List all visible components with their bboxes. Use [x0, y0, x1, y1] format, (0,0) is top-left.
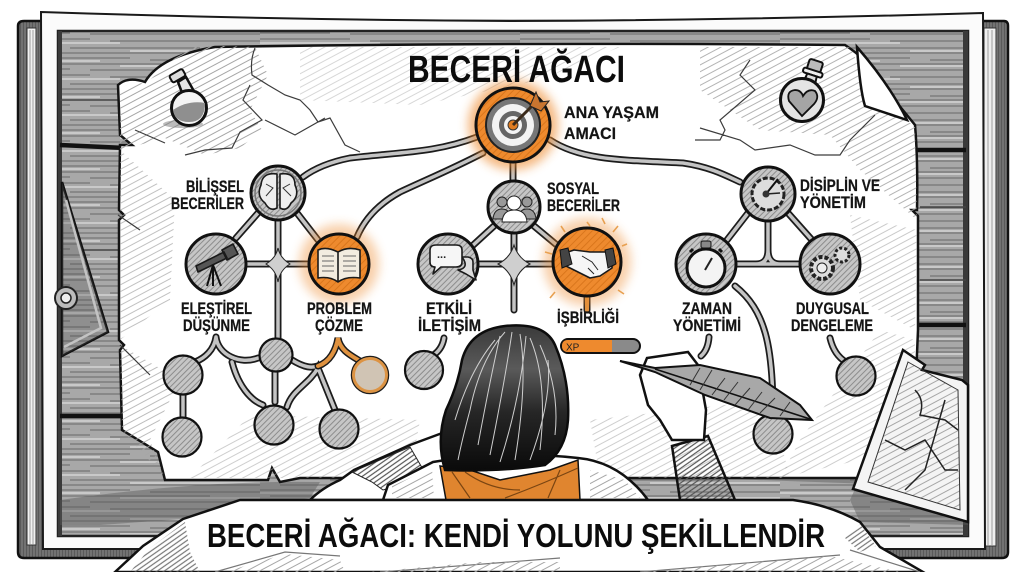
torso hatching	[392, 468, 640, 498]
node: chat	[418, 234, 478, 294]
XP progress bar	[561, 339, 640, 354]
bottom banner	[115, 500, 923, 572]
icon: left potion	[163, 69, 206, 128]
label: social skills: BECERİLER	[547, 196, 620, 215]
node: stopwatch	[676, 234, 736, 294]
label: time management: YÖNETİMİ	[673, 316, 741, 335]
label: critical thinking: ELEŞTİREL	[181, 299, 252, 318]
sketch hatching	[225, 554, 900, 572]
label: effective communication: İLETİŞİM	[418, 316, 481, 335]
folded map	[853, 350, 968, 522]
torn corners	[130, 522, 876, 572]
node: book	[299, 224, 379, 304]
hair strands	[455, 332, 556, 462]
label: main goal: AMACI	[564, 124, 616, 143]
parchment	[118, 44, 918, 482]
sketch marks	[215, 550, 920, 572]
left arm	[310, 432, 445, 500]
right arm	[672, 436, 735, 500]
node: people	[488, 181, 540, 233]
label: emotional balance: DENGELEME	[791, 316, 873, 335]
torso	[383, 455, 648, 500]
title: BECERİ AĞACI	[408, 47, 625, 91]
orange scarf	[440, 460, 580, 500]
node: telescope	[186, 234, 246, 294]
hand	[640, 352, 706, 440]
wood panel	[58, 31, 968, 536]
icon: heart potion	[780, 58, 826, 122]
hair	[441, 325, 568, 470]
label: main goal: ANA YAŞAM	[564, 103, 659, 122]
left sleeve hatching	[352, 447, 428, 490]
label: cognitive skills: BİLİŞSEL	[186, 177, 244, 196]
label: problem solving: ÇÖZME	[315, 316, 363, 335]
leaf nodes	[162, 338, 876, 456]
label: effective communication: ETKİLİ	[426, 299, 472, 318]
label: discipline: YÖNETİM	[800, 193, 866, 212]
node: handshake	[543, 218, 631, 306]
skill tree paths	[183, 137, 846, 418]
quill	[620, 361, 812, 420]
label: social skills: SOSYAL	[547, 179, 599, 198]
node: gauge	[741, 167, 795, 221]
notebook on table	[55, 182, 108, 356]
person from behind	[310, 325, 812, 500]
node: main target	[468, 80, 558, 170]
node: chat: ...	[437, 249, 446, 261]
label: collaboration: İŞBİRLİĞİ	[557, 308, 619, 327]
node: gears	[800, 234, 860, 294]
node: brain	[251, 166, 305, 220]
label: problem solving: PROBLEM	[307, 299, 372, 318]
XP progress bar: XP	[566, 342, 580, 354]
label: discipline: DİSİPLİN VE	[800, 176, 880, 195]
label: emotional balance: DUYGUSAL	[796, 299, 869, 318]
label: cognitive skills: BECERİLER	[171, 194, 244, 213]
banner text: BECERİ AĞACI: KENDİ YOLUNU ŞEKİLLENDİR	[207, 517, 825, 554]
scarf folds	[452, 468, 578, 498]
label: critical thinking: DÜŞÜNME	[183, 316, 250, 335]
label: time management: ZAMAN	[682, 299, 732, 318]
